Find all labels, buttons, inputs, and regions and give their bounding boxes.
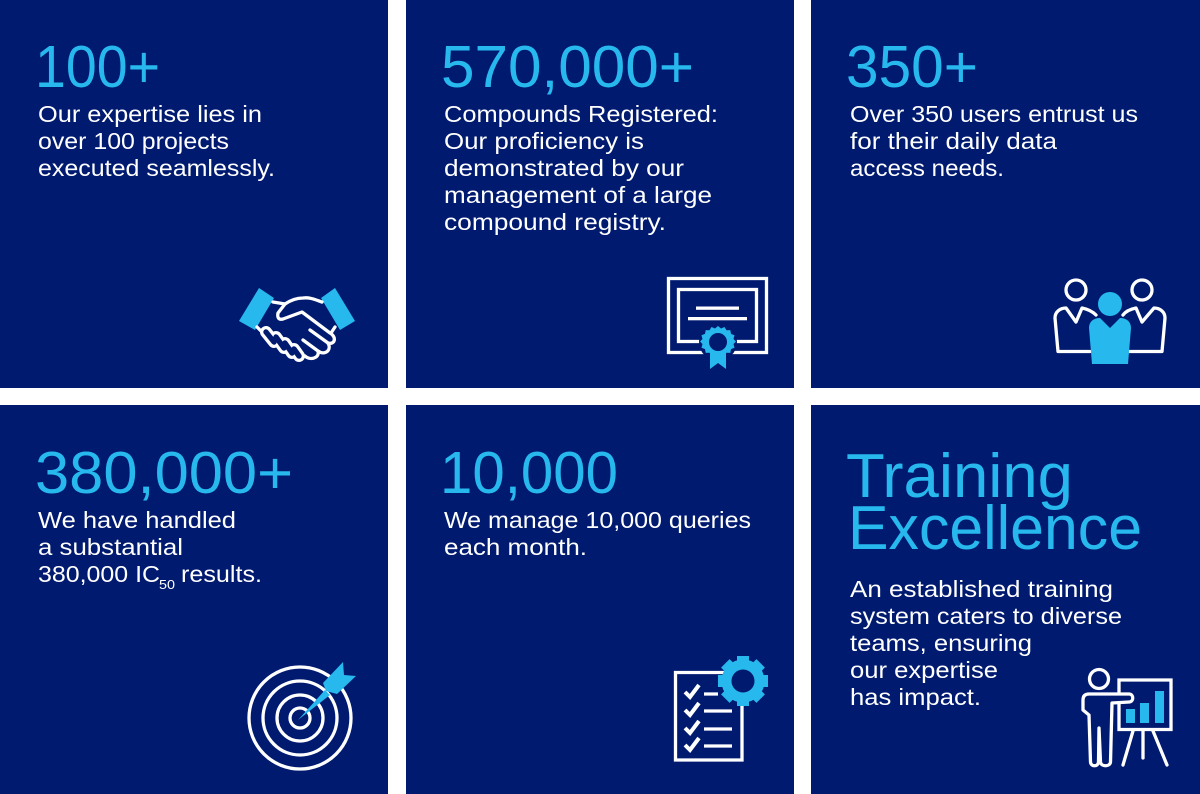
heading: 100+: 100+ [35, 34, 160, 100]
text: compounds description: Our proficiency is [444, 128, 644, 154]
text: results description: 50 [159, 577, 175, 592]
text: users description: Over 350 users entrust us [850, 101, 1138, 127]
text: results description [38, 507, 262, 592]
panel: training excellence [811, 405, 1200, 794]
text: users description: for their daily data [850, 128, 1057, 154]
heading: Training Excellence [846, 442, 1142, 563]
text: queries description: We manage 10,000 queries [444, 507, 751, 533]
text: compounds description [444, 101, 718, 235]
text: compounds description: compound registry. [444, 209, 666, 235]
text: projects description: Our expertise lies in [38, 101, 262, 127]
text: results description: results. [181, 561, 262, 587]
text: compounds description: Compounds Registered: [444, 101, 718, 127]
heading: 570,000+: 570,000+ [441, 34, 694, 100]
icon: handshake [239, 288, 355, 358]
heading: Training Excellence: Training [846, 442, 1073, 511]
text: training description: has impact. [850, 684, 981, 710]
text: results description: 380,000 IC [38, 561, 160, 587]
text: users description [850, 101, 1138, 181]
heading: 380,000+: 380,000+ [35, 440, 293, 506]
icon: team of three people [1055, 280, 1165, 364]
panel: 10,000 queries [406, 405, 794, 794]
heading: 350+: 350+ [846, 34, 978, 100]
text: results description: a substantial [38, 534, 183, 560]
text: projects description [38, 101, 275, 181]
text: users description: access needs. [850, 155, 1004, 181]
panel: 570,000+ compounds [406, 0, 794, 388]
text: training description [850, 576, 1122, 710]
heading: Training Excellence: Excellence [848, 494, 1142, 563]
icon: target with dart [249, 662, 356, 769]
text: training description: teams, ensuring [850, 630, 1032, 656]
text: projects description: over 100 projects [38, 128, 229, 154]
panel: 380,000+ results [0, 405, 388, 794]
heading: 10,000: 10,000 [440, 440, 618, 506]
text: queries description [444, 507, 751, 560]
panel: 350+ users [811, 0, 1200, 388]
text: training description: An established training [850, 576, 1113, 602]
icon: checklist with gear [676, 656, 768, 760]
icon: certificate [668, 278, 766, 369]
text: training description: our expertise [850, 657, 998, 683]
text: results description: We have handled [38, 507, 236, 533]
icon: presenter with chart [1083, 670, 1171, 766]
text: compounds description: management of a large [444, 182, 712, 208]
text: queries description: each month. [444, 534, 587, 560]
panel: 100+ projects [0, 0, 388, 388]
text: training description: system caters to diverse [850, 603, 1122, 629]
text: projects description: executed seamlessly. [38, 155, 275, 181]
text: compounds description: demonstrated by our [444, 155, 684, 181]
